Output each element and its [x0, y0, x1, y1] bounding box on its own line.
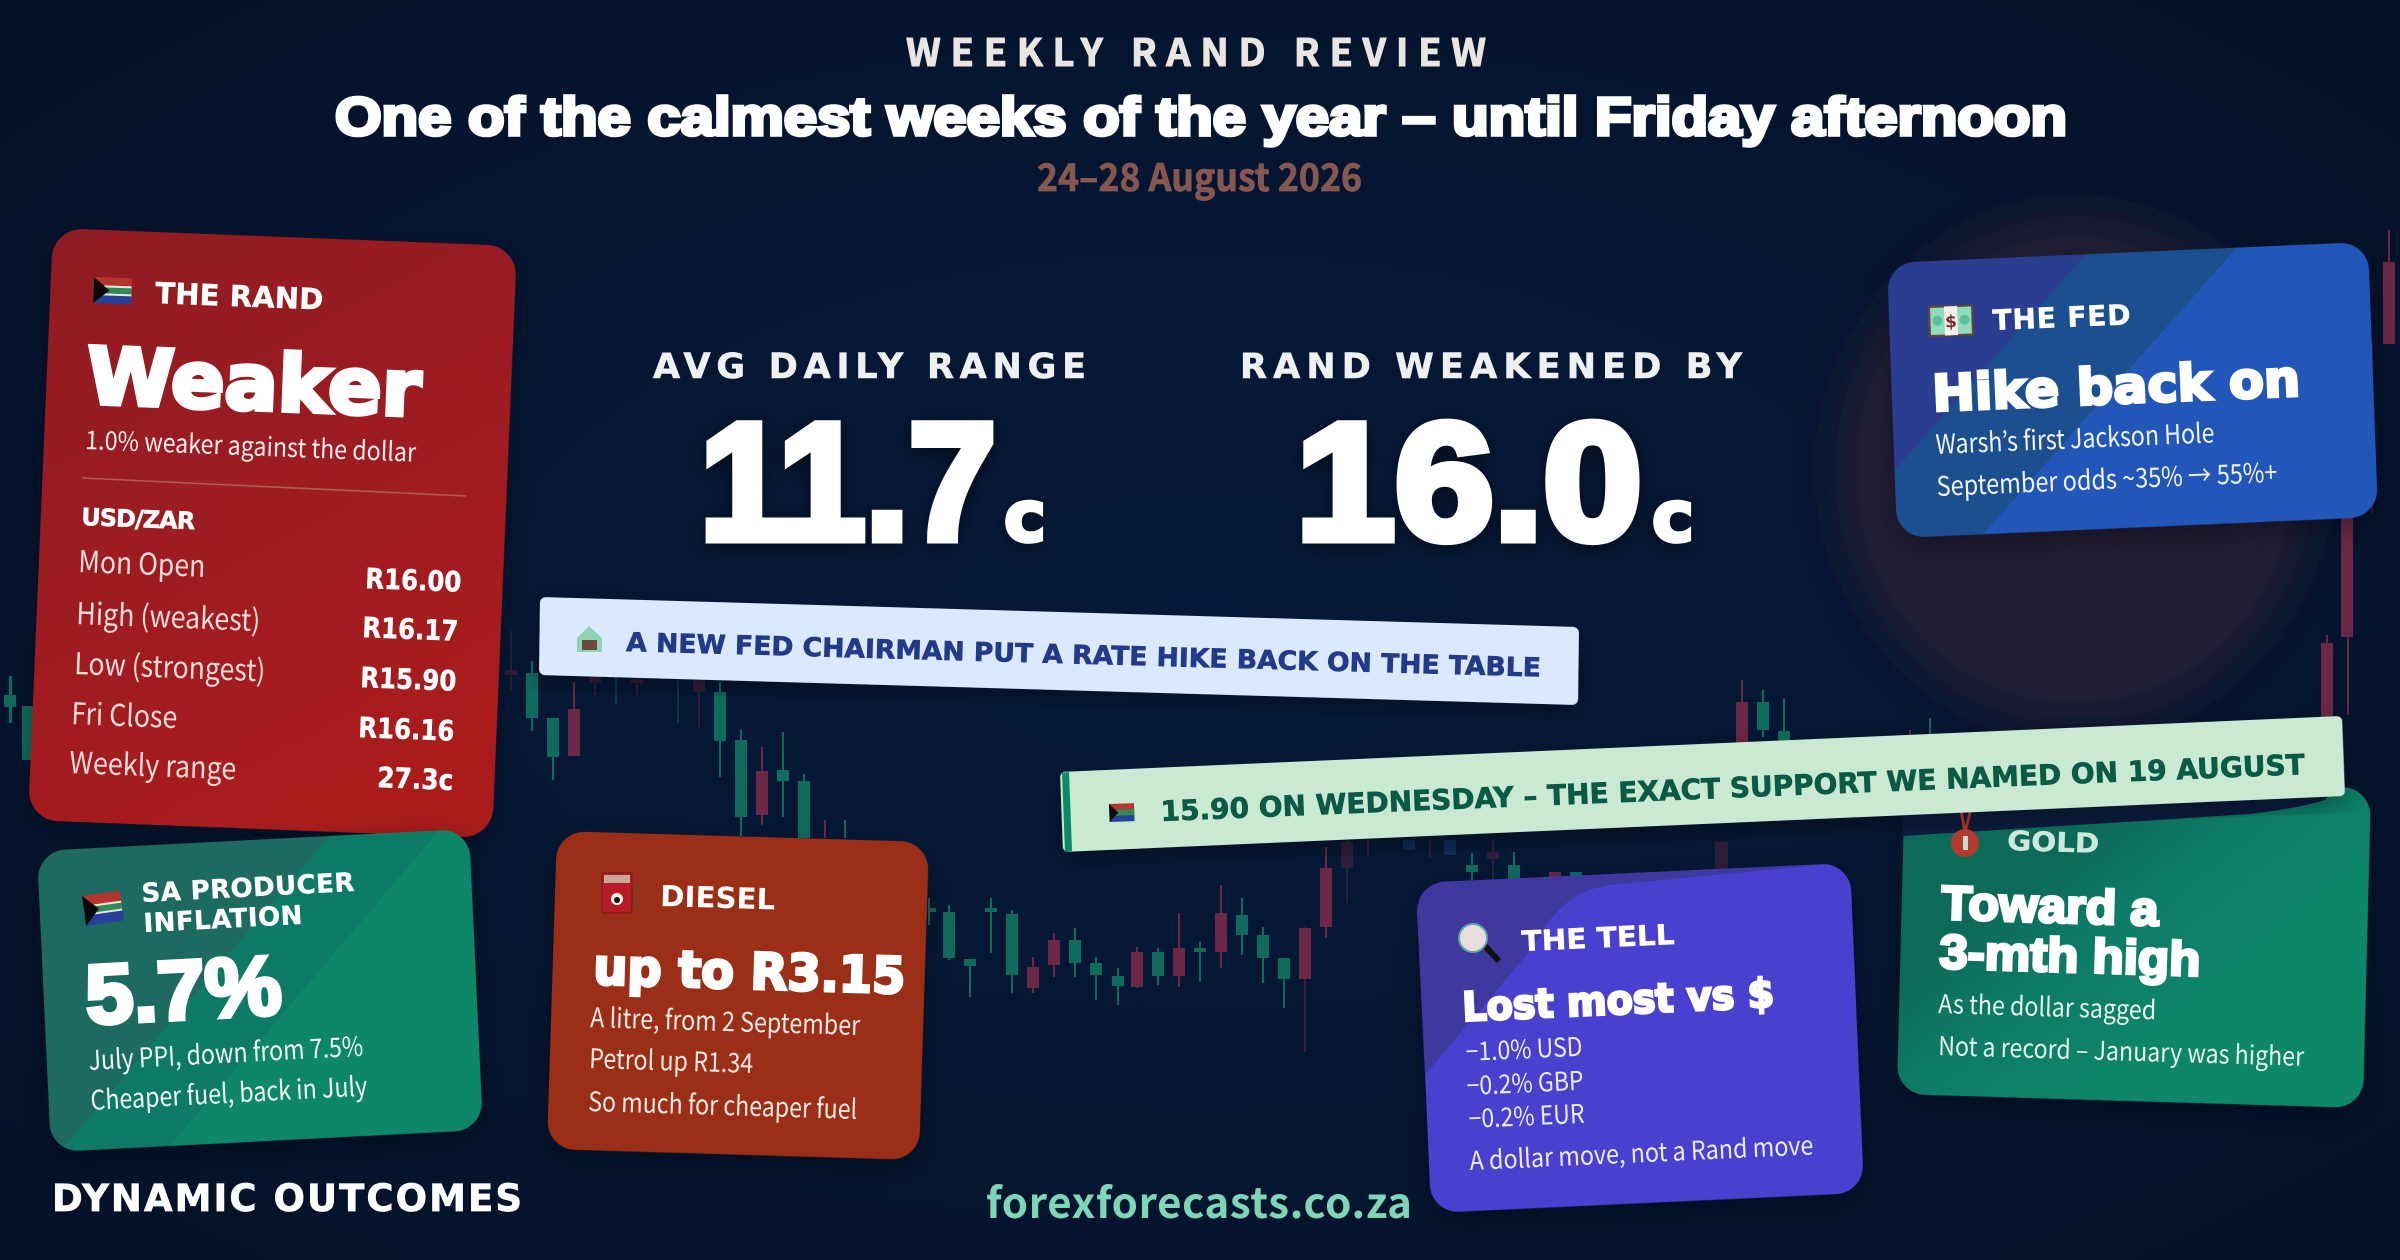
- banner: support level: 15.90 ON WEDNESDAY – THE EXACT SUPPORT WE NAMED ON 19 AUGUST: [1160, 748, 2305, 828]
- panel: SA producer inflation: [37, 829, 483, 1152]
- stat: average daily range: c: [1004, 476, 1046, 558]
- banner: new fed chairman: A NEW FED CHAIRMAN PUT A RATE HIKE BACK ON THE TABLE: [626, 628, 1541, 684]
- subhead: 1.0% weaker against the dollar: [85, 420, 418, 470]
- headline: Hike back on: [1931, 350, 2301, 423]
- table: USD/ZAR: R16.16: [358, 711, 455, 748]
- details: A litre, from 2 September: [590, 996, 861, 1043]
- panel: the fed: [1887, 242, 2378, 538]
- details: So much for cheaper fuel: [588, 1080, 858, 1127]
- banner: new fed chairman: [539, 597, 1579, 705]
- icon: magnifying glass: [1459, 924, 1499, 961]
- table: USD/ZAR: High (weakest): [76, 589, 261, 640]
- label: [141, 868, 355, 939]
- icon: South Africa flag: [93, 277, 132, 304]
- details: Petrol up R1.34: [589, 1037, 754, 1081]
- label: THE TELL: [1521, 918, 1675, 958]
- brand: dynamic outcomes: DYNAMIC OUTCOMES: [52, 1177, 522, 1220]
- label: GOLD: [2007, 826, 2100, 860]
- label: DIESEL: [660, 879, 776, 916]
- background glow: [1835, 215, 2315, 725]
- stat: rand weakened by: RAND WEAKENED BY: [1240, 347, 1743, 387]
- currency list: −1.0% USD: [1465, 1027, 1583, 1069]
- banner: support level: [1060, 716, 2345, 852]
- date: 24–28 August 2026: [1037, 147, 1362, 202]
- candlestick chart background: [4, 230, 2395, 1052]
- label: INFLATION: [143, 901, 303, 939]
- details: [1938, 984, 2306, 1074]
- icon: South Africa flag: [1109, 803, 1135, 822]
- table: USD/ZAR: Mon Open: [78, 537, 206, 586]
- panel: the tell: [1417, 863, 1864, 1213]
- headline: up to R3.15: [593, 938, 906, 1005]
- currency list: [1465, 1027, 1814, 1178]
- website: forexforecasts.co.za: [986, 1170, 1412, 1231]
- table: USD/ZAR: [69, 503, 462, 797]
- table: USD/ZAR: R16.17: [362, 611, 459, 648]
- table: USD/ZAR: R15.90: [360, 661, 457, 698]
- panel: gold: [1897, 774, 2371, 1108]
- details: [588, 996, 861, 1127]
- headline: [1939, 877, 2201, 987]
- headline: Toward a: [1941, 877, 2159, 936]
- icon: fuel pump: [602, 873, 637, 913]
- panel: diesel: [547, 831, 929, 1160]
- currency list: −0.2% EUR: [1468, 1094, 1585, 1136]
- headline: Lost most vs $: [1461, 971, 1775, 1031]
- currency list: −0.2% GBP: [1466, 1061, 1584, 1103]
- icon: medal: [1951, 805, 1979, 857]
- label: THE RAND: [155, 276, 324, 316]
- icon: banknotes: $: [1945, 312, 1957, 332]
- icon: banknotes: [1929, 305, 1973, 336]
- details: Not a record – January was higher: [1938, 1026, 2306, 1074]
- stat: average daily range: [653, 347, 1086, 575]
- details: July PPI, down from 7.5%: [87, 1025, 364, 1078]
- headline: 3-mth high: [1939, 926, 2201, 987]
- details: Warsh’s first Jackson Hole: [1935, 411, 2215, 462]
- eyebrow: weekly rand review: WEEKLY RAND REVIEW: [906, 22, 1486, 77]
- stat: rand weakened by: 16.0: [1296, 390, 1642, 575]
- table: USD/ZAR: Low (strongest): [74, 639, 266, 690]
- label: SA PRODUCER: [141, 868, 355, 909]
- table: USD/ZAR: Weekly range: [69, 738, 237, 788]
- label: THE FED: [1992, 298, 2131, 337]
- stat: average daily range: 11.7: [700, 390, 996, 575]
- stat: rand weakened by: [1240, 347, 1743, 575]
- table: USD/ZAR: Fri Close: [71, 689, 178, 737]
- details: As the dollar sagged: [1938, 984, 2157, 1027]
- panel: the rand: [28, 228, 517, 838]
- details: September odds ~35% → 55%+: [1936, 451, 2278, 504]
- currency list: A dollar move, not a Rand move: [1469, 1125, 1814, 1178]
- details: Cheaper fuel, back in July: [89, 1065, 368, 1118]
- table: USD/ZAR: R16.00: [365, 562, 462, 599]
- icon: bank building: [577, 626, 602, 652]
- details: [1935, 411, 2278, 504]
- title: One of the calmest weeks of the year – until Friday afternoon: [335, 87, 2067, 147]
- icon: South Africa flag: [82, 891, 124, 926]
- headline: Weaker: [85, 332, 423, 435]
- stat: average daily range: AVG DAILY RANGE: [653, 347, 1086, 387]
- stat: rand weakened by: c: [1652, 476, 1694, 558]
- headline value: 5.7%: [83, 938, 284, 1042]
- table: USD/ZAR: 27.3c: [377, 761, 454, 797]
- details: [87, 1025, 368, 1118]
- table: USD/ZAR: USD/ZAR: [81, 503, 196, 535]
